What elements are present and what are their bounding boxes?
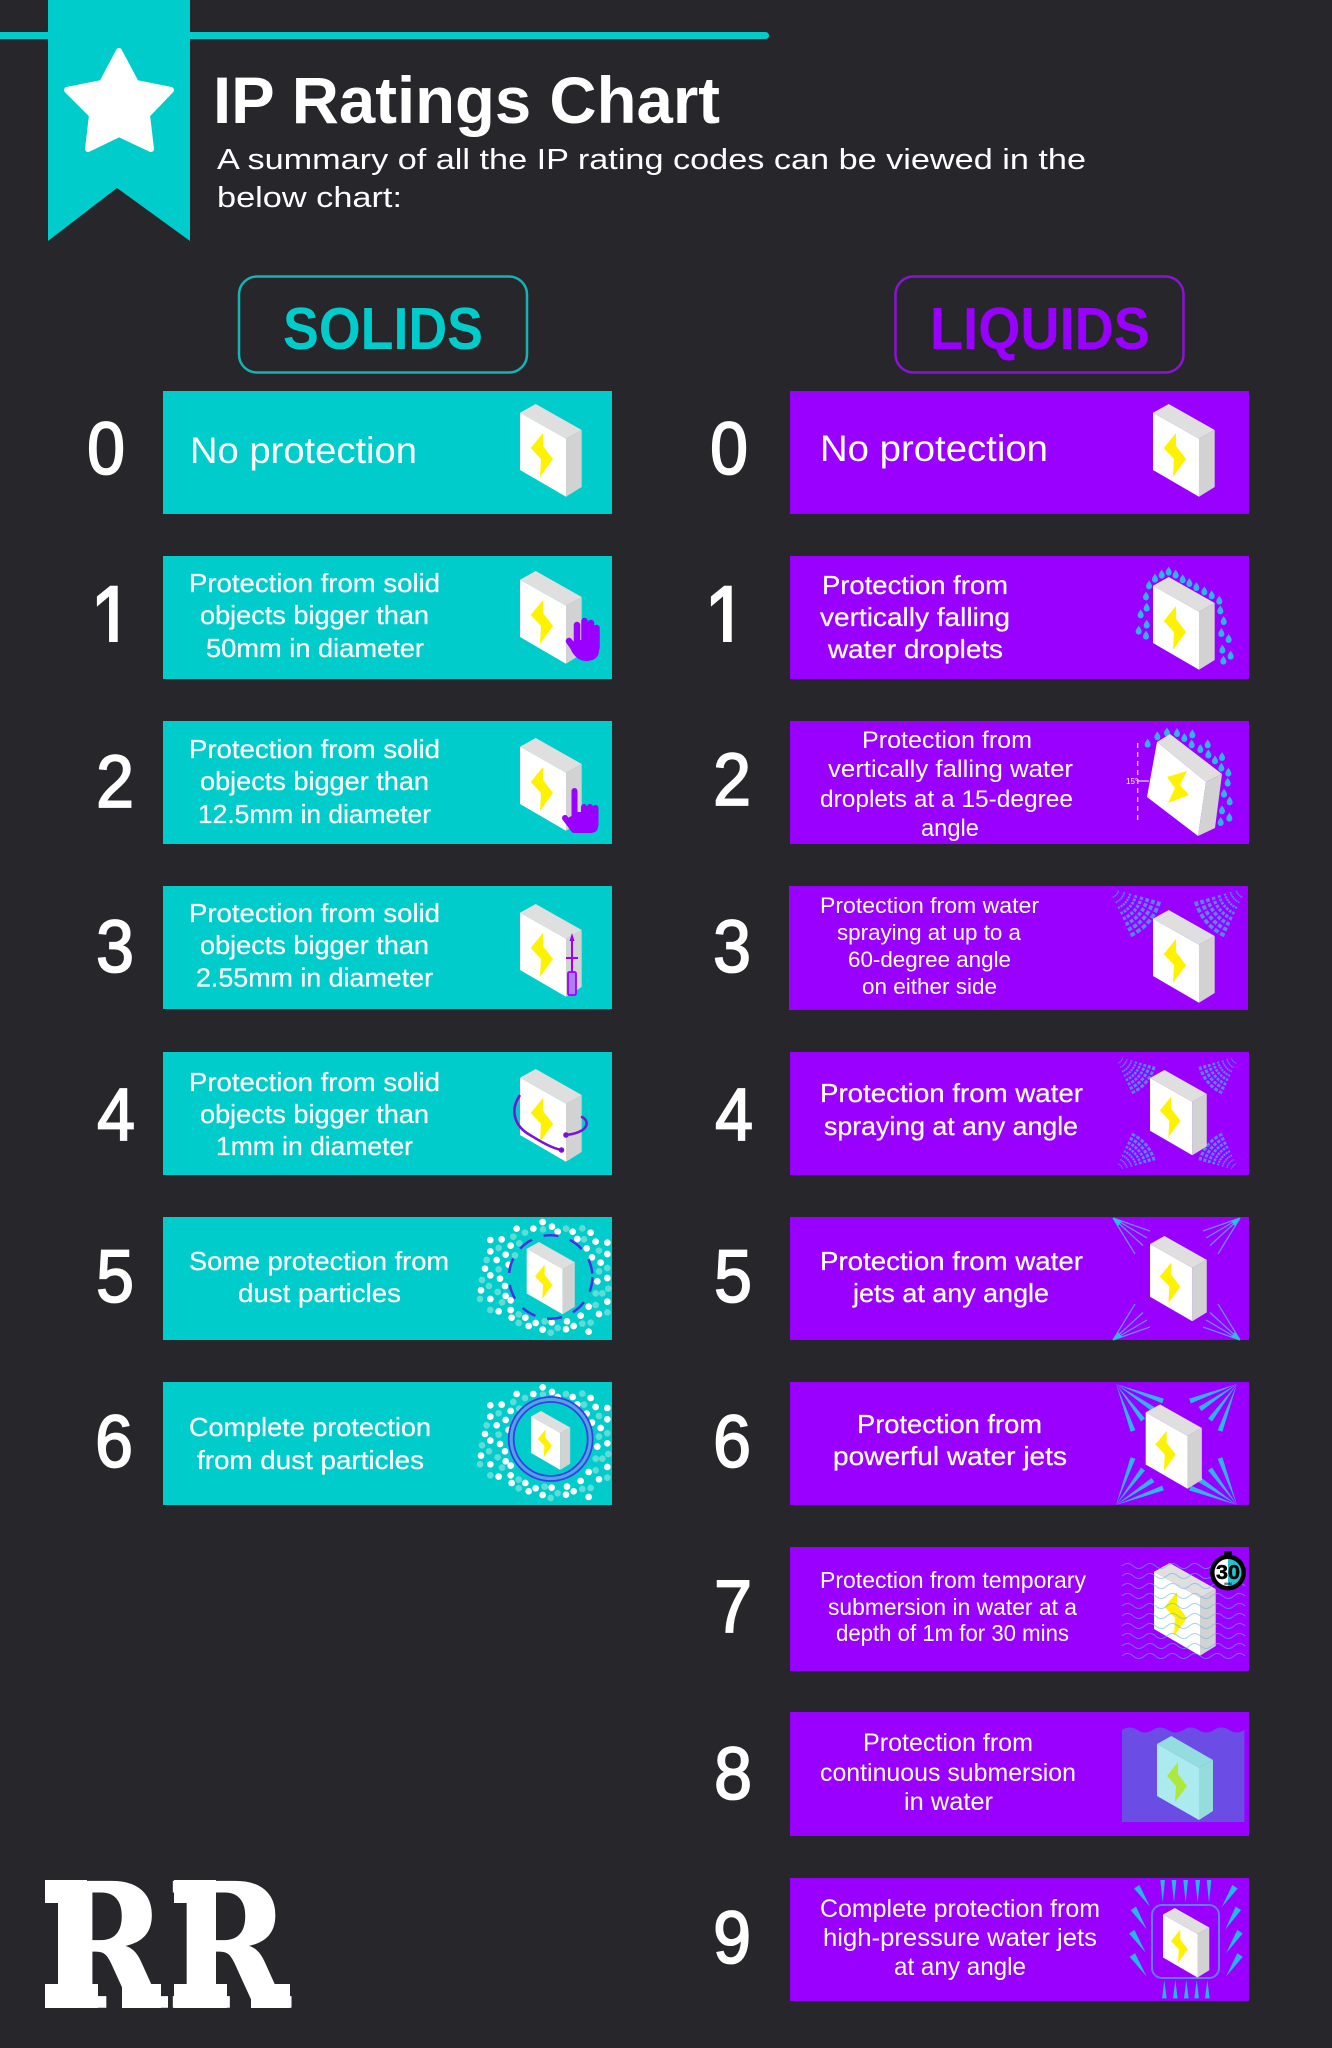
panel: liquids 1: vertically falling — [820, 602, 1010, 632]
icon: box with spray from all corners — [1118, 1058, 1236, 1169]
liquids number 6: 6 — [713, 1401, 751, 1484]
panel: solids 5 — [163, 1217, 612, 1340]
panel: solids 3: objects bigger than — [200, 930, 429, 960]
panel: liquids 8: in water — [904, 1788, 993, 1816]
heading: liquids: LIQUIDS — [930, 296, 1150, 362]
panel: solids 4 — [163, 1052, 612, 1175]
panel: liquids 8 — [790, 1712, 1249, 1836]
icon: box with spray from sides — [1113, 891, 1242, 1003]
panel: solids 6 — [163, 1382, 612, 1505]
liquids number 5: 5 — [714, 1236, 752, 1319]
solids number 0: 0 — [87, 408, 125, 491]
icon: box in dust — [477, 1219, 611, 1336]
panel: liquids 2: angle — [921, 815, 979, 842]
panel: liquids 9: at any angle — [894, 1953, 1026, 1981]
panel: liquids 6 — [790, 1382, 1249, 1505]
icon: tilted box with droplets: 15° — [1126, 777, 1138, 786]
logo: RR — [43, 1845, 291, 2048]
panel: solids 1: Protection from solid — [189, 568, 440, 598]
icon: box under waves with 30 minute timer — [1122, 1551, 1246, 1658]
panel: liquids 3: 60-degree angle — [848, 947, 1011, 972]
panel: solids 5: Some protection from — [189, 1246, 449, 1276]
icon: box with pointing hand — [520, 738, 598, 833]
solids number 4: 4 — [97, 1074, 135, 1157]
panel: liquids 5: Protection from water — [820, 1246, 1083, 1276]
panel: solids 0: No protection — [190, 430, 417, 471]
icon: box with falling droplets — [1136, 567, 1234, 670]
panel: liquids 6: Protection from — [857, 1409, 1042, 1439]
heading: solids: SOLIDS — [283, 296, 483, 362]
panel: liquids 5: jets at any angle — [852, 1278, 1049, 1308]
liquids number 0: 0 — [710, 408, 748, 491]
panel: solids 2: Protection from solid — [189, 734, 440, 764]
panel: liquids 3: spraying at up to a — [837, 920, 1022, 945]
subtitle: below chart: — [217, 182, 402, 214]
icon: box — [1153, 404, 1215, 497]
panel: solids 2 — [163, 721, 612, 844]
panel: liquids 9: high-pressure water jets — [823, 1924, 1097, 1952]
liquids number 7: 7 — [714, 1566, 752, 1649]
panel: solids 3: 2.55mm in diameter — [196, 962, 433, 992]
title: IP Ratings Chart — [213, 63, 720, 137]
panel: liquids 2: Protection from — [862, 727, 1032, 754]
liquids number 3: 3 — [713, 906, 751, 989]
panel: liquids 3: Protection from water — [820, 893, 1039, 918]
panel: liquids 4: Protection from water — [820, 1078, 1083, 1108]
icon: box — [520, 404, 582, 497]
panel: liquids 9: Complete protection from — [820, 1895, 1100, 1923]
panel: liquids 6: powerful water jets — [833, 1441, 1067, 1471]
panel: solids 0 — [163, 391, 612, 514]
liquids number 8: 8 — [714, 1733, 752, 1816]
panel: liquids 4 — [790, 1052, 1249, 1175]
icon: box with screwdriver — [520, 904, 582, 997]
panel: solids 6: from dust particles — [197, 1445, 424, 1475]
subtitle — [217, 144, 1086, 214]
subtitle: A summary of all the IP rating codes can be viewed in the — [217, 144, 1086, 176]
icon: stopwatch: MIN — [1224, 1581, 1232, 1586]
liquids number 9: 9 — [713, 1897, 751, 1980]
solids number 2: 2 — [96, 741, 134, 824]
panel: liquids 9 — [790, 1878, 1249, 2001]
solids number 5: 5 — [96, 1236, 134, 1319]
panel: liquids 5 — [790, 1217, 1249, 1340]
icon: tilted box with droplets — [1126, 727, 1233, 836]
icon: box with water jets — [1113, 1218, 1240, 1340]
panel: liquids 3: on either side — [862, 974, 997, 999]
liquids number 1: 1 — [704, 568, 748, 670]
heading: solids — [239, 276, 527, 372]
icon: sealed box with high pressure jets — [1129, 1880, 1243, 1998]
panel: liquids 8: Protection from — [863, 1729, 1033, 1757]
panel: liquids 7 — [790, 1547, 1249, 1671]
panel: liquids 2: vertically falling water — [828, 756, 1073, 783]
panel: liquids 1: water droplets — [827, 634, 1003, 664]
icon: box with powerful jets — [1116, 1384, 1237, 1505]
panel: solids 1 — [163, 556, 612, 679]
icon: box with hand — [520, 571, 599, 664]
panel: liquids 7: Protection from temporary — [820, 1567, 1086, 1593]
panel: solids 4: Protection from solid — [189, 1067, 440, 1097]
panel: liquids 1: Protection from — [822, 570, 1008, 600]
panel: liquids 0 — [790, 391, 1249, 514]
icon: stopwatch: 30 — [1216, 1562, 1240, 1584]
panel: solids 5: dust particles — [238, 1278, 401, 1308]
solids number 1: 1 — [90, 568, 134, 670]
panel: liquids 7: submersion in water at a — [828, 1594, 1077, 1620]
panel: solids 4: objects bigger than — [200, 1099, 429, 1129]
panel: solids 1: objects bigger than — [200, 600, 429, 630]
liquids number 2: 2 — [713, 739, 751, 822]
panel: liquids 3 — [789, 886, 1248, 1010]
panel: solids 4: 1mm in diameter — [216, 1131, 413, 1161]
panel: solids 3: Protection from solid — [189, 898, 440, 928]
icon: box with orbit arrow — [514, 1069, 587, 1162]
panel: solids 6: Complete protection — [189, 1412, 431, 1442]
panel: solids 2: objects bigger than — [200, 766, 429, 796]
panel: liquids 1 — [790, 556, 1249, 679]
panel: solids 1: 50mm in diameter — [206, 633, 424, 663]
solids number 3: 3 — [96, 906, 134, 989]
panel: solids 3 — [163, 886, 612, 1009]
icon: submerged box — [1122, 1728, 1244, 1822]
panel: liquids 8: continuous submersion — [820, 1759, 1076, 1787]
panel: liquids 0: No protection — [820, 428, 1048, 469]
liquids number 4: 4 — [715, 1074, 753, 1157]
panel: liquids 4: spraying at any angle — [824, 1111, 1078, 1141]
heading: liquids — [896, 276, 1184, 372]
icon: sealed box in dust — [477, 1384, 611, 1501]
panel: solids 2: 12.5mm in diameter — [198, 799, 431, 829]
panel: liquids 2 — [790, 721, 1249, 844]
header rule — [0, 32, 769, 39]
solids number 6: 6 — [95, 1401, 133, 1484]
panel: liquids 7: depth of 1m for 30 mins — [836, 1620, 1069, 1646]
ribbon badge with star — [48, 0, 190, 241]
icon: stopwatch — [1210, 1551, 1246, 1590]
panel: liquids 2: droplets at a 15-degree — [820, 786, 1073, 813]
